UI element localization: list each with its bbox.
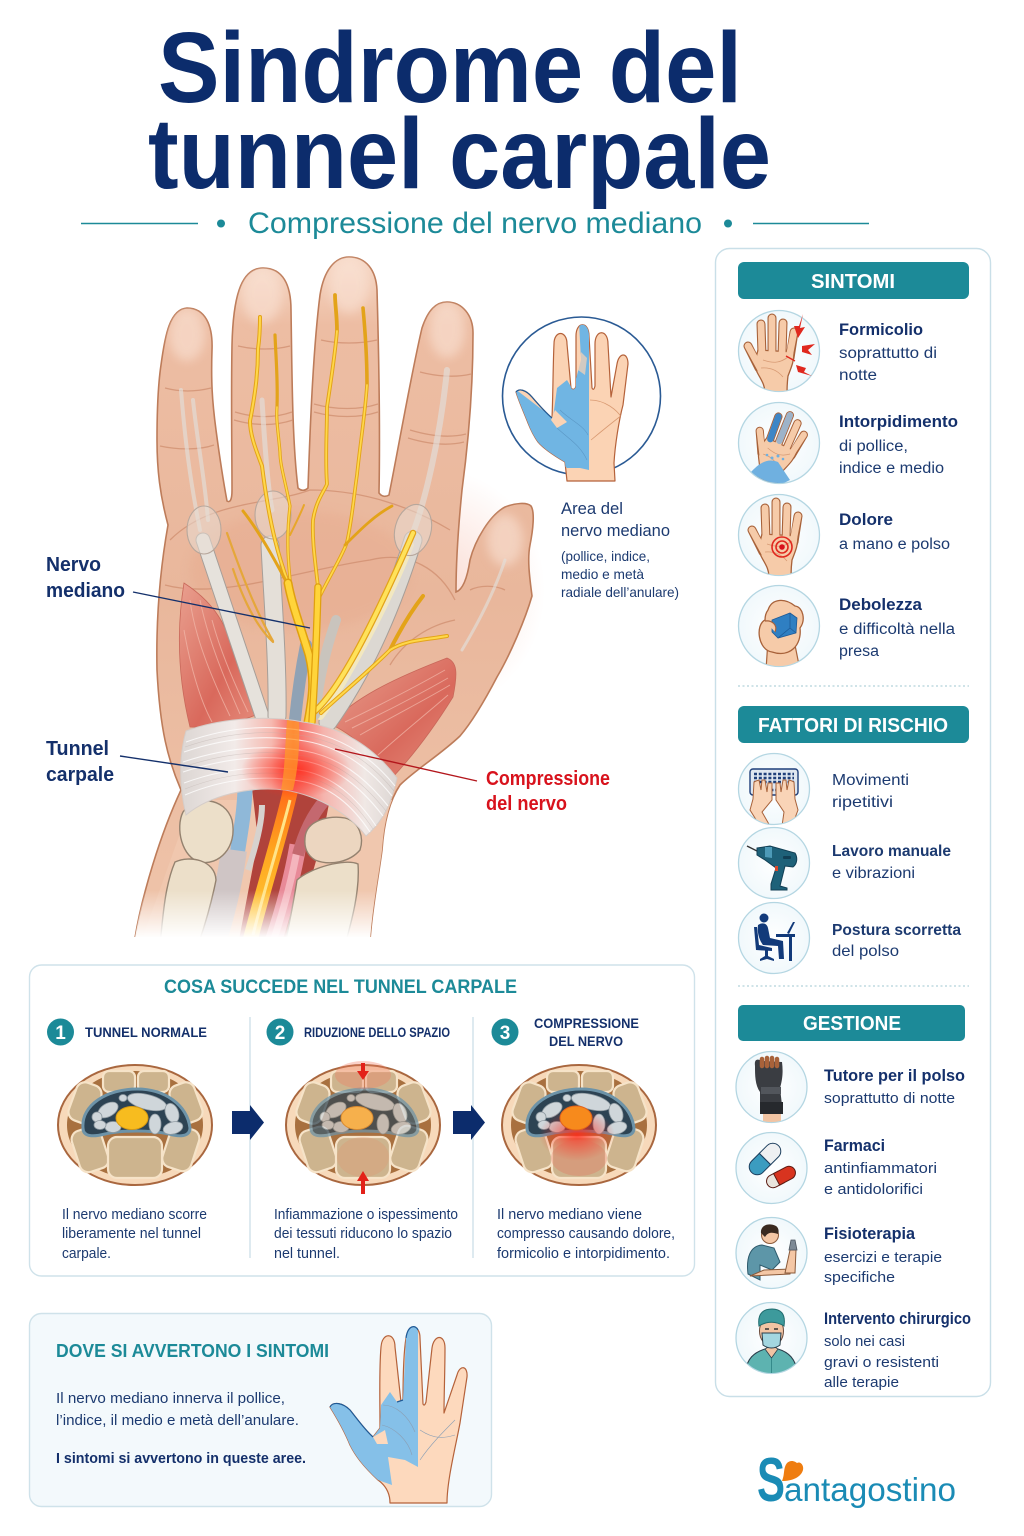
risk: postura scorretta: Postura scorretta bbox=[832, 922, 961, 939]
risk: lavoro manuale: e vibrazioni bbox=[832, 865, 915, 882]
soft background glow bbox=[335, 470, 545, 710]
stage 1: TUNNEL NORMALE bbox=[85, 1024, 207, 1040]
inset circle bbox=[502, 317, 660, 475]
callout: nervo mediano: mediano bbox=[46, 580, 125, 602]
symptom: debolezza: Debolezza bbox=[839, 595, 923, 614]
logo: santagostino bbox=[757, 1446, 956, 1515]
hand map bbox=[330, 1327, 467, 1503]
panel text: Il nervo mediano innerva il pollice, bbox=[56, 1391, 285, 1407]
panel: dove si avvertono i sintomi bbox=[30, 1314, 492, 1506]
stage 1: 1 bbox=[55, 1023, 66, 1044]
symptom: intorpidimento bbox=[738, 402, 958, 490]
symptom: debolezza: e difficoltà nella bbox=[839, 621, 955, 638]
subtitle: Compressione del nervo mediano bbox=[248, 207, 702, 240]
callout: nervo mediano bbox=[46, 554, 310, 628]
finger creases bbox=[160, 340, 505, 665]
management: farmaci: e antidolorifici bbox=[824, 1181, 923, 1198]
translucent finger tendons bbox=[181, 370, 505, 650]
main hand anatomy illustration bbox=[120, 257, 545, 949]
inset caption: nervo mediano bbox=[561, 522, 670, 540]
wrist bones bbox=[160, 801, 361, 945]
management: tutore: Tutore per il polso bbox=[824, 1067, 965, 1085]
header: sintomi: SINTOMI bbox=[811, 271, 895, 293]
management: fisioterapia bbox=[736, 1218, 942, 1288]
symptom: dolore bbox=[738, 494, 950, 578]
risk: lavoro manuale: Lavoro manuale bbox=[832, 843, 951, 860]
risk: movimenti ripetitivi: ripetitivi bbox=[832, 794, 893, 811]
tendons bbox=[203, 540, 413, 722]
wrist tissue bbox=[178, 800, 392, 937]
panel heading: COSA SUCCEDE NEL TUNNEL CARPALE bbox=[164, 977, 517, 998]
title: Sindrome del bbox=[158, 12, 742, 124]
management: tutore: soprattutto di notte bbox=[824, 1090, 955, 1107]
callout: compressione del nervo: del nervo bbox=[486, 793, 567, 815]
symptom: formicolio: soprattutto di bbox=[839, 345, 937, 362]
management: fisioterapia: Fisioterapia bbox=[824, 1225, 916, 1243]
stage 3: DEL NERVO bbox=[549, 1033, 623, 1049]
inset caption: medio e metà bbox=[561, 566, 644, 582]
risk: movimenti ripetitivi: Movimenti bbox=[832, 772, 909, 789]
inset caption: radiale dell’anulare) bbox=[561, 584, 679, 600]
compression glow bbox=[244, 745, 348, 796]
header: sintomi bbox=[738, 262, 969, 299]
title: tunnel carpale bbox=[148, 98, 771, 210]
stage 3: formicolio e intorpidimento. bbox=[497, 1246, 670, 1262]
symptom: formicolio: Formicolio bbox=[839, 320, 923, 339]
inset caption: Area del bbox=[561, 500, 623, 518]
symptom: intorpidimento: indice e medio bbox=[839, 460, 944, 477]
symptom: dolore: a mano e polso bbox=[839, 536, 950, 553]
stage 3: COMPRESSIONE bbox=[534, 1015, 639, 1031]
stage 1: carpale. bbox=[62, 1246, 111, 1262]
management: farmaci bbox=[736, 1132, 937, 1204]
symptom: debolezza bbox=[738, 586, 955, 670]
stage 2: Infiammazione o ispessimento bbox=[274, 1207, 458, 1223]
panel: right sidebar bbox=[716, 248, 990, 1396]
stage 1 bbox=[47, 1018, 212, 1262]
panel: tunnel stages bbox=[30, 965, 694, 1276]
stage 3 bbox=[492, 1015, 675, 1262]
bottom fade bbox=[135, 892, 375, 937]
stage 1: liberamente nel tunnel bbox=[62, 1226, 201, 1242]
stage 2: 2 bbox=[275, 1023, 285, 1044]
risk: postura scorretta bbox=[738, 902, 961, 974]
stage 2: nel tunnel. bbox=[274, 1246, 340, 1262]
logo: santagostino: S bbox=[757, 1446, 785, 1515]
inset caption bbox=[561, 500, 679, 600]
logo heart bbox=[782, 1461, 803, 1481]
hand silhouette bbox=[135, 257, 533, 940]
nerve below tunnel bbox=[249, 788, 291, 945]
callout: tunnel carpale bbox=[46, 738, 228, 786]
header: fattori di rischio: FATTORI DI RISCHIO bbox=[758, 715, 948, 737]
symptom: formicolio: notte bbox=[839, 367, 877, 384]
panel text bbox=[56, 1391, 306, 1467]
palm shading bbox=[190, 510, 410, 630]
management: farmaci: antinfiammatori bbox=[824, 1160, 937, 1177]
hypothenar muscle bbox=[179, 583, 258, 727]
stage 3: 3 bbox=[500, 1023, 510, 1044]
stage 1: Il nervo mediano scorre bbox=[62, 1207, 207, 1223]
inset hand bbox=[510, 322, 628, 481]
symptom: formicolio bbox=[738, 310, 937, 394]
subtitle bbox=[81, 207, 869, 240]
knuckle bones bbox=[187, 491, 437, 560]
symptom: intorpidimento: di pollice, bbox=[839, 438, 908, 455]
callout: nervo mediano: Nervo bbox=[46, 554, 101, 576]
management: fisioterapia: esercizi e terapie bbox=[824, 1249, 942, 1266]
symptom: intorpidimento: Intorpidimento bbox=[839, 412, 958, 431]
logo: santagostino: antagostino bbox=[784, 1471, 956, 1508]
management: intervento chirurgico bbox=[736, 1302, 971, 1391]
callout: compressione del nervo: Compressione bbox=[486, 768, 610, 790]
thenar muscle bbox=[330, 658, 456, 778]
stage 3: Il nervo mediano viene bbox=[497, 1207, 642, 1223]
risk: movimenti ripetitivi bbox=[738, 754, 909, 826]
arrow 2 bbox=[453, 1105, 485, 1140]
management: farmaci: Farmaci bbox=[824, 1137, 885, 1155]
management: intervento chirurgico: solo nei casi bbox=[824, 1333, 905, 1350]
panel text: I sintomi si avvertono in queste aree. bbox=[56, 1451, 306, 1467]
header: fattori di rischio bbox=[738, 706, 969, 743]
arrow 1 bbox=[232, 1105, 264, 1140]
management: intervento chirurgico: Intervento chirurgico bbox=[824, 1310, 971, 1328]
stage 2: dei tessuti riducono lo spazio bbox=[274, 1226, 452, 1242]
stage 2 bbox=[266, 1018, 458, 1262]
median nerve branches bbox=[227, 295, 447, 722]
callout: tunnel carpale: Tunnel bbox=[46, 738, 109, 760]
panel text: l’indice, il medio e metà dell’anulare. bbox=[56, 1413, 299, 1429]
management: fisioterapia: specifiche bbox=[824, 1269, 895, 1286]
header: gestione: GESTIONE bbox=[803, 1013, 901, 1035]
risk: postura scorretta: del polso bbox=[832, 943, 899, 960]
panel heading: DOVE SI AVVERTONO I SINTOMI bbox=[56, 1341, 329, 1361]
tendons below band bbox=[212, 790, 325, 945]
callout: compressione del nervo bbox=[335, 749, 610, 815]
management: intervento chirurgico: gravi o resistenti bbox=[824, 1354, 939, 1371]
inset: median nerve area bbox=[502, 317, 660, 481]
header: gestione bbox=[738, 1005, 965, 1041]
stage 3: compresso causando dolore, bbox=[497, 1226, 675, 1242]
inset caption: (pollice, indice, bbox=[561, 548, 650, 564]
callout: tunnel carpale: carpale bbox=[46, 764, 114, 786]
title bbox=[148, 12, 771, 210]
management: tutore bbox=[736, 1052, 965, 1125]
risk: lavoro manuale bbox=[738, 828, 951, 898]
symptom: dolore: Dolore bbox=[839, 510, 893, 529]
stage 2: RIDUZIONE DELLO SPAZIO bbox=[304, 1024, 450, 1040]
symptom: debolezza: presa bbox=[839, 643, 879, 660]
management: intervento chirurgico: alle terapie bbox=[824, 1374, 899, 1391]
transverse carpal ligament bbox=[181, 718, 397, 836]
finger shading bbox=[169, 257, 523, 566]
